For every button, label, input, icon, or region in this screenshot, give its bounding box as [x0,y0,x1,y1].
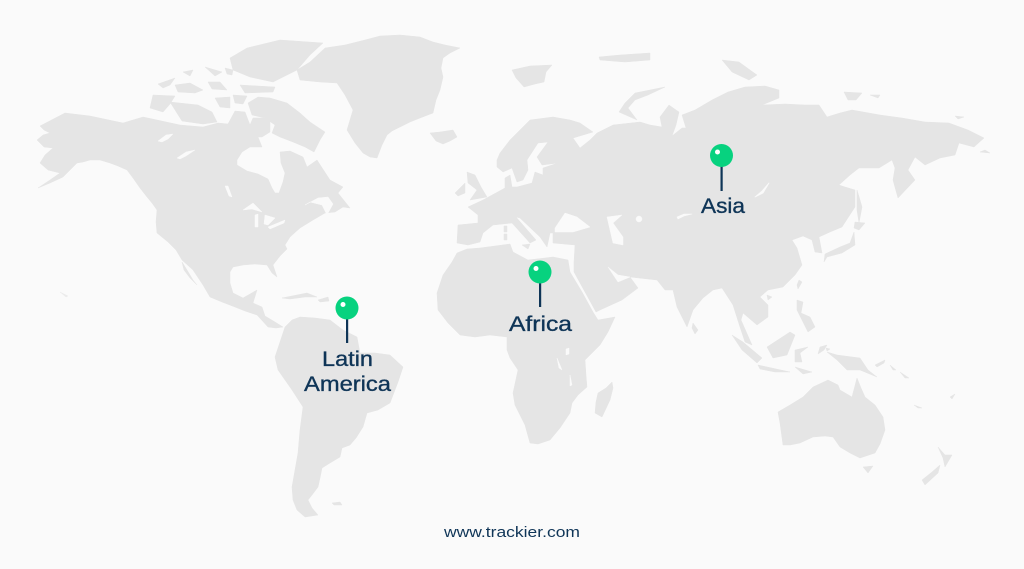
label: Latin America [304,348,391,396]
land: Japan and Sakhalin [824,190,865,262]
land: South America [275,317,403,517]
world map [37,35,990,517]
land: Canadian Arctic islands [150,40,325,152]
land: Greenland [297,35,460,158]
land: New Zealand [922,447,952,485]
land: Africa [437,244,615,444]
land: Falkland Islands [332,502,342,505]
land: North America [37,111,350,328]
land: Tasmania [863,466,873,473]
land: Eurasia [457,86,984,345]
pin: Latin America [336,296,358,343]
land: New Guinea and Pacific islands [826,348,955,408]
water: inland seas and gulfs [158,134,769,386]
website URL: www.trackier.com [443,525,580,541]
label: Latin America: Latin [322,348,373,371]
land: Arctic islands of Eurasia [512,53,990,153]
pin: Africa [528,260,552,307]
land: Madagascar [595,382,613,417]
pin: Asia [710,144,733,191]
land: British Isles [455,172,487,200]
land: Mediterranean islands [504,226,530,249]
land: Iceland [430,130,457,144]
label: Latin America: America [304,373,391,396]
land: Southeast Asia islands [692,280,827,374]
label: Africa: Africa [509,313,572,336]
land: Cuba and Caribbean [60,292,329,302]
label: Asia: Asia [701,195,745,218]
land: Australia [778,378,885,458]
